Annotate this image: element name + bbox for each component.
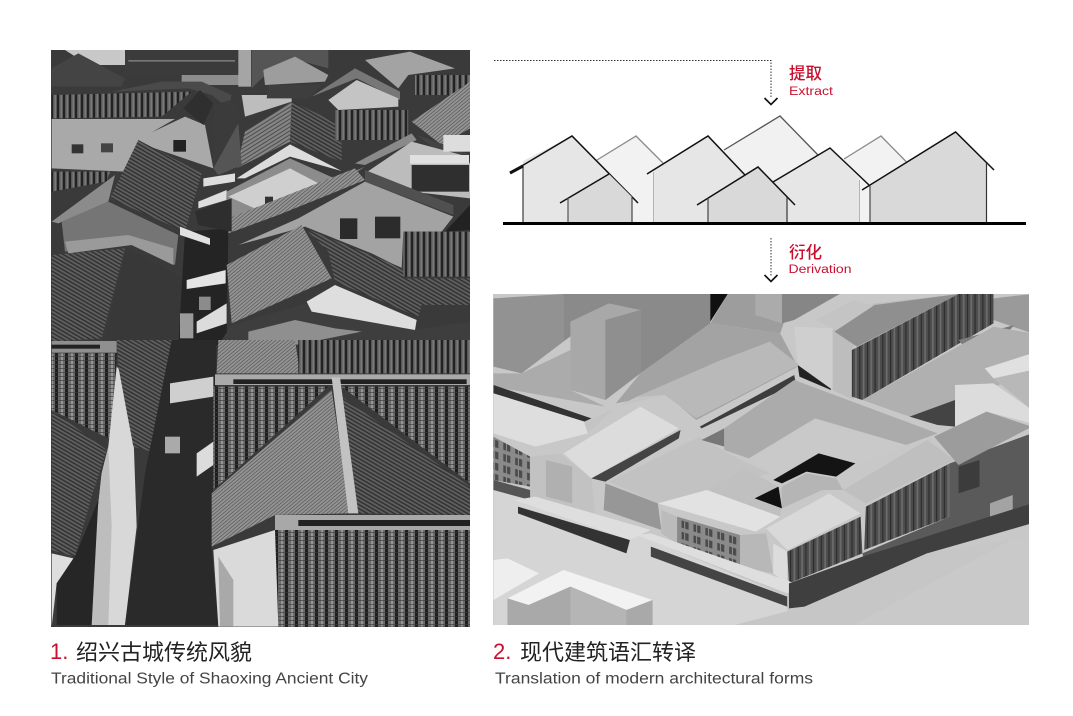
house: back row left bbox=[597, 136, 663, 223]
house: right centre bbox=[760, 148, 869, 223]
caption 1: Traditional Style of Shaoxing Ancient City bbox=[51, 670, 368, 688]
label: extract: Extract bbox=[789, 86, 834, 98]
diagram: abstract house silhouettes bbox=[503, 116, 1026, 225]
house: small left bbox=[560, 174, 632, 223]
caption 2 bbox=[493, 639, 813, 688]
house: back row right bbox=[844, 136, 906, 223]
photo: traditional rooftops of Shaoxing bbox=[51, 50, 470, 627]
caption 2: Translation of modern architectural forms bbox=[495, 670, 813, 688]
house: small centre bbox=[697, 167, 795, 223]
label: extract: 提取 bbox=[789, 64, 822, 83]
diagram: extract arrow bbox=[494, 60, 778, 104]
caption 2: 2. bbox=[493, 639, 511, 664]
label: derivation: Derivation bbox=[788, 264, 852, 276]
ground line bbox=[503, 222, 1026, 225]
label: derivation bbox=[788, 243, 852, 276]
label: derivation: 衍化 bbox=[789, 243, 822, 262]
caption 1 bbox=[50, 639, 368, 688]
house: large left bbox=[510, 136, 638, 223]
caption 1: 绍兴古城传统风貌 bbox=[76, 640, 252, 665]
house: centre bbox=[647, 136, 760, 223]
diagram: derivation arrow bbox=[764, 238, 778, 282]
house: back row centre bbox=[724, 116, 818, 223]
label: extract bbox=[789, 64, 834, 98]
caption 1: 1. bbox=[50, 639, 68, 664]
house: large right bbox=[862, 132, 994, 223]
caption 2: 现代建筑语汇转译 bbox=[520, 640, 696, 665]
render: modern architectural model bbox=[493, 294, 1032, 625]
